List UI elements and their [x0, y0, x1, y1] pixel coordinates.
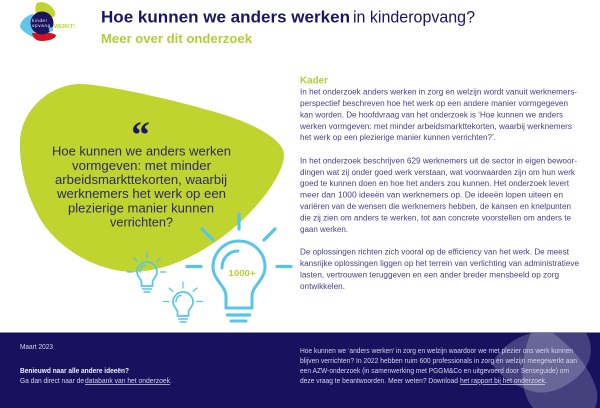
text block: Kader paragraph three: lasten, vertrouwen teruggeven en een ander breder mensbeeld op zorg [300, 270, 559, 280]
label: 1000+: 1000+ [228, 268, 256, 278]
footer callout: databank: databank van het onderzoek [85, 376, 170, 385]
text block: Kader paragraph two: In het onderzoek beschrijven 629 werknemers uit de sector in eigen bewoor- [300, 156, 577, 166]
footer callout: databank [20, 366, 172, 385]
title: Hoe kunnen we anders werken [101, 8, 350, 26]
text block: Kader paragraph two: variëren van de wensen die werknemers hebben, de kansen en knelpunten [300, 202, 571, 211]
text block: Kader paragraph one: werken vormgeven: met minder arbeidsmarkttekorten, waarbij werknemers [299, 122, 572, 131]
footer callout: databank: Benieuwd naar alle andere ideeën? [20, 366, 129, 375]
footer text block: about the research [300, 346, 577, 385]
footer callout: databank: . [170, 376, 172, 385]
subtitle: Meer over dit onderzoek [101, 32, 252, 46]
quote text: plezierige manier kunnen [68, 200, 214, 216]
text block: Kader paragraph one: kan worden. De hoofdvraag van het onderzoek is ‘Hoe kunnen we anders [300, 110, 563, 120]
text block: Kader paragraph one: perspectief beschreven hoe het werk op een andere manier vormgegeven [300, 99, 568, 108]
text block: Kader paragraph three: ontwikkelen. [300, 282, 345, 291]
panel: footer [0, 332, 600, 408]
quote text: Hoe kunnen we anders werken [52, 144, 231, 158]
logo: kinderopvang werkt: WERKT! [54, 24, 75, 30]
quote text: verrichten? [110, 214, 173, 230]
quote text: vormgeven: met minder [72, 158, 212, 173]
text block: Kader paragraph one: In het onderzoek anders werken in zorg en welzijn wordt vanuit werknemers- [300, 88, 577, 96]
text block: Kader paragraph two: die zij zien om anders te werken, tot aan concrete voorstellen om anders te [300, 214, 572, 222]
logo: kinderopvang werkt [20, 2, 75, 41]
footer text block: about the research: . [545, 376, 547, 385]
icon: quotation mark: “ [131, 115, 150, 156]
icon: small light bulb two [164, 282, 202, 322]
footer text block: about the research: Hoe kunnen we ‘anders werken’ in zorg en welzijn waardoor we met plezier ons werk kunnen [300, 346, 573, 355]
title [101, 8, 475, 26]
text block: Kader paragraph three [300, 248, 580, 291]
footer callout: databank: Ga dan direct naar de [20, 376, 84, 385]
text block: Kader paragraph two: dingen wat zij onder goed werk verstaan, wat voorwaarden zijn om hun werk [300, 168, 576, 177]
decorative footer blobs [492, 333, 597, 408]
footer date: Maart 2023 [20, 342, 53, 351]
text block: Kader paragraph two [300, 156, 577, 234]
quote text: arbeidsmarkttekorten, waarbij [55, 172, 227, 187]
quote text [52, 144, 231, 230]
icon: small light bulb one [128, 252, 166, 292]
text block: Kader paragraph two: meer dan 1000 ideeën van werknemers op. De ideeën lopen uiteen en [300, 190, 563, 200]
text block: Kader paragraph one: het werk op een plezierige manier kunnen verrichten?’. [300, 133, 496, 142]
quote text: werknemers het werk op een [56, 186, 226, 201]
text block: Kader paragraph three: De oplossingen richten zich vooral op de efficiency van het werk. De meest [300, 248, 570, 256]
title: in kinderopvang? [353, 8, 475, 26]
logo: kinderopvang werkt: kinder [32, 18, 48, 23]
text block: Kader paragraph one [299, 88, 577, 142]
heading: Kader: Kader [300, 76, 328, 86]
logo: kinderopvang werkt: opvang [32, 23, 51, 28]
footer text block: about the research: het rapport bij het onderzoek [460, 376, 545, 385]
text block: Kader paragraph two: gaan werken. [300, 225, 348, 234]
footer text block: about the research: deze vraag te beantwoorden. Meer weten? Download [300, 376, 458, 385]
text block: Kader paragraph two: goed te kunnen doen en hoe het anders zou kunnen. Het onderzoek levert [300, 179, 570, 188]
panel: green quote blob [20, 84, 284, 272]
text block: Kader paragraph three: kansrijke oplossingen liggen op het terrein van verlichting van administratieve [300, 259, 580, 268]
icon: large light bulb [187, 214, 291, 321]
footer text block: about the research: een AZW-onderzoek (in samenwerking met PGGM&Co en uitgevoerd door Senseguide) om [300, 366, 569, 375]
